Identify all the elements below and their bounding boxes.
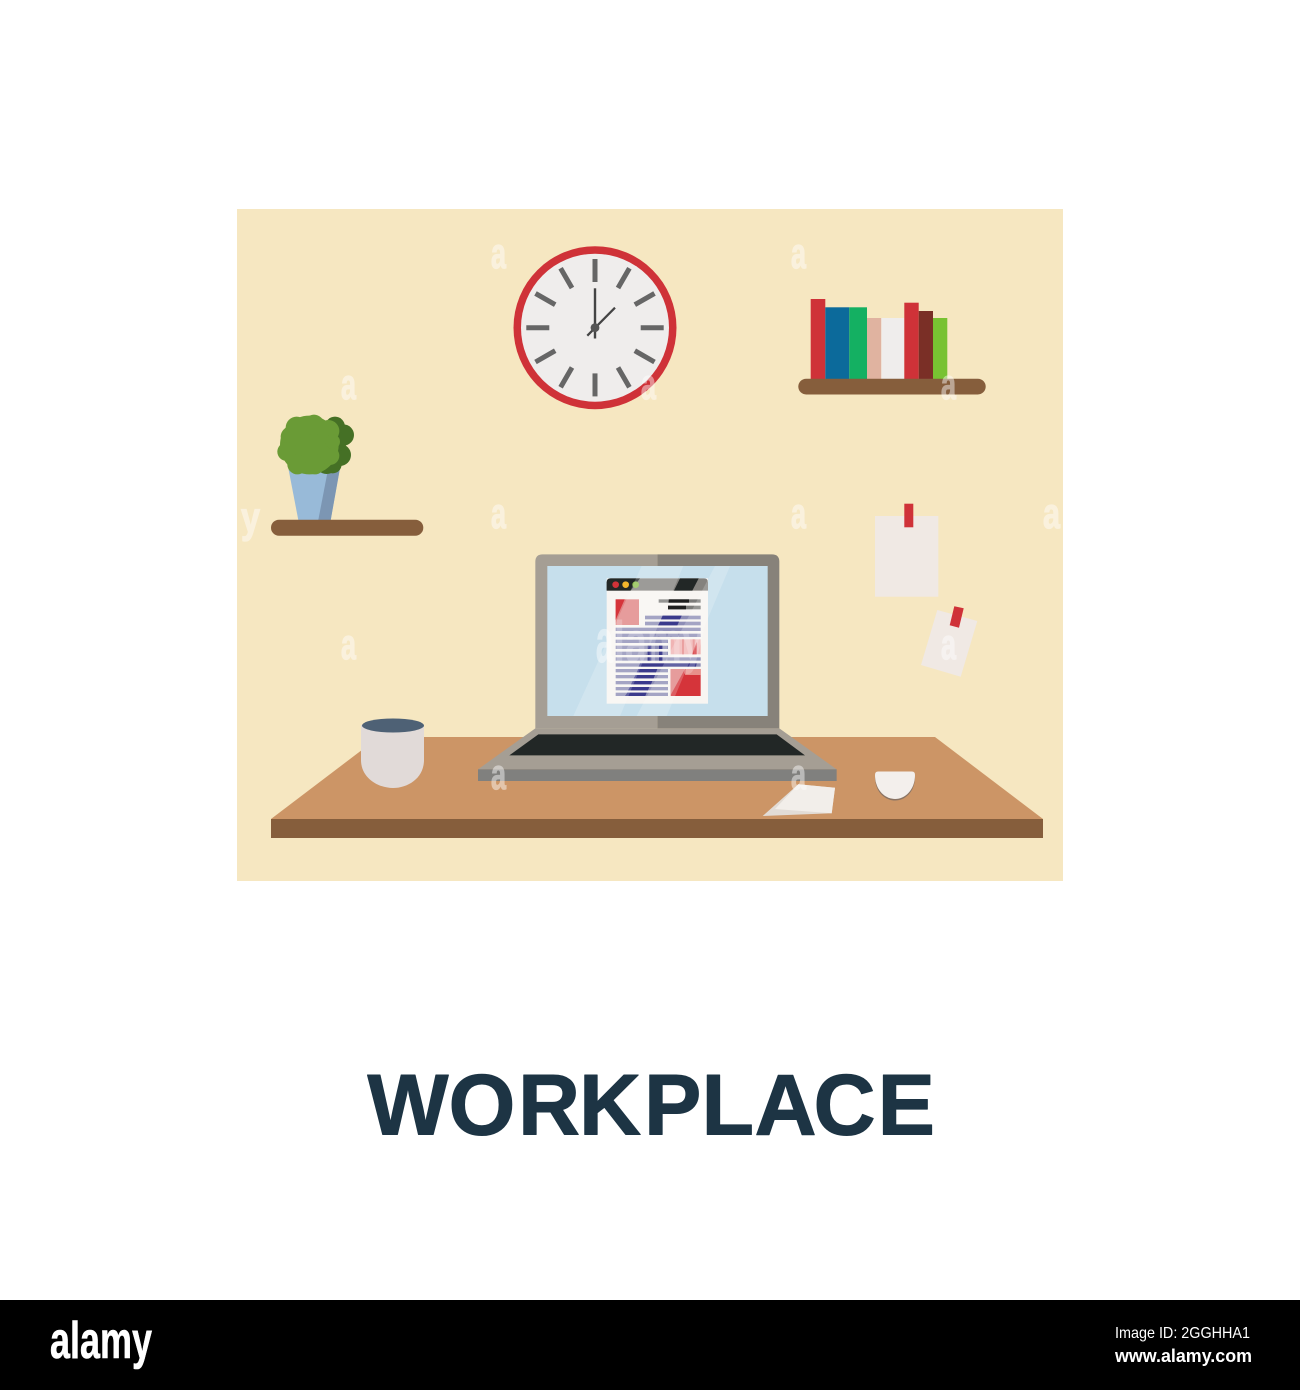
icon: computer mouse bbox=[875, 772, 915, 800]
icon: pinned note large bbox=[875, 504, 938, 597]
pink chart block bbox=[671, 639, 701, 654]
red image block bbox=[671, 669, 701, 696]
screen reflections bbox=[573, 566, 730, 716]
wall background bbox=[237, 209, 1063, 881]
panel: workplace illustration bbox=[237, 209, 1063, 881]
alamy watermarks: a bbox=[641, 361, 657, 409]
central watermark letters: lamy bbox=[614, 610, 704, 675]
icon: potted plant on shelf bbox=[271, 415, 423, 536]
alamy watermarks: a bbox=[941, 361, 957, 409]
icon: pinned note small bbox=[921, 606, 977, 677]
alamy watermarks: a bbox=[491, 490, 507, 538]
alamy watermarks: a bbox=[596, 608, 613, 675]
image block bbox=[616, 599, 639, 625]
alamy watermarks: a bbox=[491, 230, 507, 278]
alamy watermarks: a bbox=[1043, 490, 1061, 538]
website: www.alamy.com bbox=[1114, 1346, 1252, 1366]
title: WORKPLACE bbox=[367, 1058, 935, 1154]
alamy watermarks: a bbox=[491, 751, 507, 799]
icon: bookshelf bbox=[798, 299, 986, 394]
icon: laptop bbox=[478, 554, 837, 781]
icon: papers on desk bbox=[763, 784, 835, 816]
alamy watermarks: a bbox=[791, 751, 807, 799]
laptop lid bbox=[535, 554, 779, 728]
alamy watermarks: a bbox=[941, 621, 957, 669]
alamy watermarks: a bbox=[341, 361, 357, 409]
alamy watermarks: a bbox=[791, 490, 807, 538]
text lines bbox=[616, 616, 701, 696]
laptop base bbox=[478, 728, 837, 781]
image id: Image ID: 2GGHHA1 bbox=[1115, 1325, 1250, 1342]
alamy watermarks bbox=[241, 230, 1061, 799]
desk bbox=[271, 737, 1043, 838]
icon: wall clock bbox=[514, 246, 676, 409]
web page on screen bbox=[607, 578, 708, 704]
icon: coffee cup bbox=[361, 718, 424, 788]
alamy watermarks: y bbox=[241, 494, 260, 542]
alamy watermarks: a bbox=[341, 621, 357, 669]
footer bar bbox=[0, 1300, 1300, 1390]
alamy logo: alamy bbox=[50, 1312, 152, 1370]
alamy watermarks: a bbox=[791, 230, 807, 278]
